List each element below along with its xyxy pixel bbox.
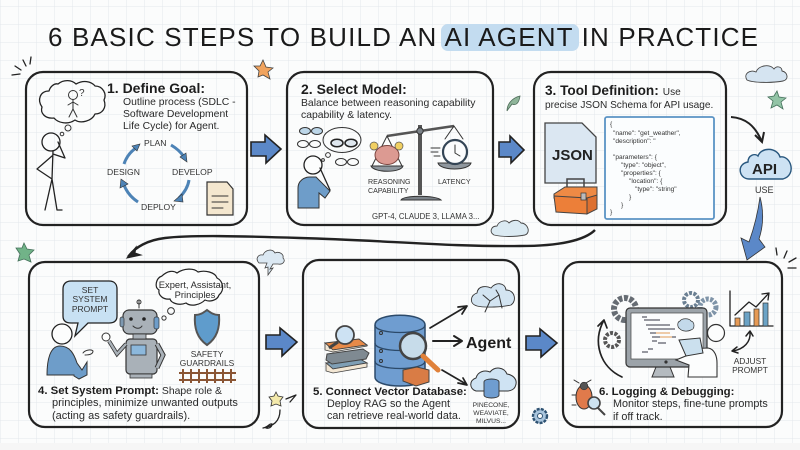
panel: step 1 define goal — [12, 57, 247, 225]
decorative spark lines — [12, 57, 31, 75]
icon: api cloud: API — [752, 161, 777, 178]
step 6 heading and description: if off track. — [613, 411, 663, 423]
icon: person — [47, 324, 93, 379]
icon: robot — [102, 300, 174, 378]
arrow: feedback loop — [598, 320, 622, 377]
icon: small star and scribble — [263, 392, 296, 428]
thought cloud: Expert, Assistant, — [159, 279, 231, 290]
step 5 heading and description: can retrieve real-world data. — [327, 410, 461, 422]
step 1 description: Software Development — [123, 109, 228, 120]
vector database names: MILVUS... — [476, 418, 506, 425]
step 3 heading and description: precise JSON Schema for API usage. — [545, 100, 713, 111]
icon: cloud top right — [746, 66, 787, 82]
thought cloud — [156, 269, 231, 305]
arrow: database to vector cloud — [442, 370, 467, 385]
step 4 heading and description: principles, minimize unwanted outputs — [52, 397, 238, 409]
sdlc cycle diagram: PLAN — [144, 138, 166, 148]
step 6 heading and description: Monitor steps, fine-tune prompts — [613, 398, 768, 410]
panel: step 4 system prompt — [29, 262, 259, 427]
step 1 description: Life Cycle) for Agent. — [123, 121, 219, 132]
json code box: { — [610, 121, 613, 128]
icon: knowledge graph cloud — [471, 284, 514, 312]
step 6 heading and description: 6. Logging & Debugging: — [599, 386, 734, 398]
thought cloud: Principles — [175, 289, 216, 300]
json code box: } — [621, 202, 624, 209]
step 1 heading: 1. Define Goal: — [107, 80, 205, 96]
adjust prompt label: PROMPT — [732, 365, 768, 375]
icon: person choosing glasses — [298, 128, 361, 208]
icon: cloud middle — [491, 220, 528, 236]
step 2 description: capability & latency. — [301, 110, 392, 121]
json code box — [605, 117, 714, 219]
icon: json file: JSON — [552, 147, 593, 164]
json code box: "type": "string" — [635, 186, 677, 193]
step 1 description: Outline process (SDLC - — [123, 97, 236, 108]
balance scale: CAPABILITY — [368, 187, 409, 195]
arrow: tool definition to api — [731, 117, 764, 142]
step 5 heading and description: 5. Connect Vector Database: — [313, 386, 467, 398]
api use label: USE — [755, 185, 774, 195]
json code box: "location": { — [629, 178, 663, 185]
icon: document — [207, 182, 233, 215]
balance scale: LATENCY — [438, 177, 471, 186]
sdlc cycle diagram: DEVELOP — [172, 167, 213, 177]
icon: computer monitor with code — [626, 308, 707, 377]
icon: small book stack — [403, 367, 429, 386]
sdlc cycle diagram: DEPLOY — [141, 202, 176, 212]
model names: GPT-4, CLAUDE 3, LLAMA 3... — [372, 212, 479, 221]
sdlc cycle diagram — [107, 138, 213, 212]
icon: green star — [768, 91, 786, 109]
icon: bar chart with rising arrow — [730, 291, 773, 326]
arrow: step 2 to 3 — [499, 136, 524, 163]
icons: gears — [605, 293, 716, 347]
step 3 heading and description: Use — [663, 87, 681, 98]
balance scale — [368, 125, 471, 200]
arrow: step 5 to 6 — [526, 329, 557, 357]
json code box: } — [629, 194, 632, 201]
speech bubble — [63, 281, 117, 336]
speech bubble: PROMPT — [72, 304, 108, 314]
arrow: step 1 to 2 — [251, 135, 281, 163]
panel: step 6 logging and debugging — [563, 248, 796, 427]
icon: orange toolbox — [554, 179, 597, 214]
icon: vector database cloud — [471, 368, 516, 398]
step 4 heading and description: 4. Set System Prompt: — [38, 385, 159, 397]
arrow: chart to adjust prompt — [732, 331, 753, 353]
icon: orange star — [254, 60, 273, 79]
icon: thinking stick figure — [37, 133, 65, 210]
title: 6 BASIC STEPS TO BUILD AN AI AGENT IN PRACTICE — [48, 22, 758, 52]
icon: person with tablet — [676, 324, 724, 377]
safety guardrails label: SAFETY — [191, 349, 224, 359]
icon: storm cloud doodle — [257, 250, 284, 275]
json code box: "name": "get_weather", — [613, 130, 681, 137]
panel: step 5 vector database — [303, 260, 519, 428]
sdlc cycle diagram: DESIGN — [107, 167, 140, 177]
vector database names: PINECONE, — [473, 402, 510, 409]
icon: stopwatch — [431, 140, 467, 164]
icon: ladybug with magnifier — [572, 380, 605, 415]
icon: json file — [545, 123, 596, 183]
step 4 heading and description: (acting as safety guardrails). — [52, 410, 190, 422]
arrow: step 4 to 5 — [266, 328, 297, 356]
json code box: "type": "object", — [621, 162, 666, 169]
icon: small blue gear — [533, 409, 547, 423]
speech bubble: SYSTEM — [73, 294, 107, 304]
icon: thought cloud with figure — [40, 81, 105, 136]
icon: large magnifier — [400, 333, 438, 370]
speech bubble: SET — [82, 285, 98, 295]
step 5 heading and description: Deploy RAG so the Agent — [327, 398, 450, 410]
json code box: "description": " — [613, 138, 656, 145]
step 4 heading and description: Shape role & — [162, 386, 222, 397]
decorative spark lines — [776, 248, 796, 268]
icon: wooden fence — [179, 369, 236, 383]
json code box: } — [610, 209, 613, 216]
icon: database cylinders — [375, 315, 425, 386]
step 3 heading and description: 3. Tool Definition: — [545, 83, 659, 98]
panel: step 3 tool definition — [534, 72, 726, 225]
arrow: step 3 back to step 4 — [127, 230, 595, 258]
icon: thought cloud with figure: ? — [79, 88, 85, 99]
step 2 heading: 2. Select Model: — [301, 81, 407, 97]
panel: step 2 select model — [287, 72, 493, 225]
icon: api cloud — [740, 149, 791, 195]
agent label: Agent — [466, 335, 512, 352]
json code box: "parameters": { — [613, 154, 658, 161]
icon: shield — [195, 310, 219, 345]
arrow: database to graph cloud — [430, 306, 467, 328]
vector database names: WEAVIATE, — [473, 410, 509, 417]
icon: green star left — [16, 243, 34, 262]
arrow: api down to step 6 — [741, 197, 765, 260]
arrow: database to agent — [433, 336, 462, 346]
icon: brain — [375, 146, 399, 164]
icon: books with magnifier — [325, 326, 369, 373]
icon: light bulbs — [370, 142, 403, 150]
balance scale: REASONING — [368, 178, 411, 186]
step 2 description: Balance between reasoning capability — [301, 98, 476, 109]
json code box: "properties": { — [621, 170, 662, 177]
safety guardrails label: GUARDRAILS — [180, 358, 235, 368]
adjust prompt label: ADJUST — [734, 356, 766, 366]
icon: green leaf doodle — [507, 96, 520, 111]
